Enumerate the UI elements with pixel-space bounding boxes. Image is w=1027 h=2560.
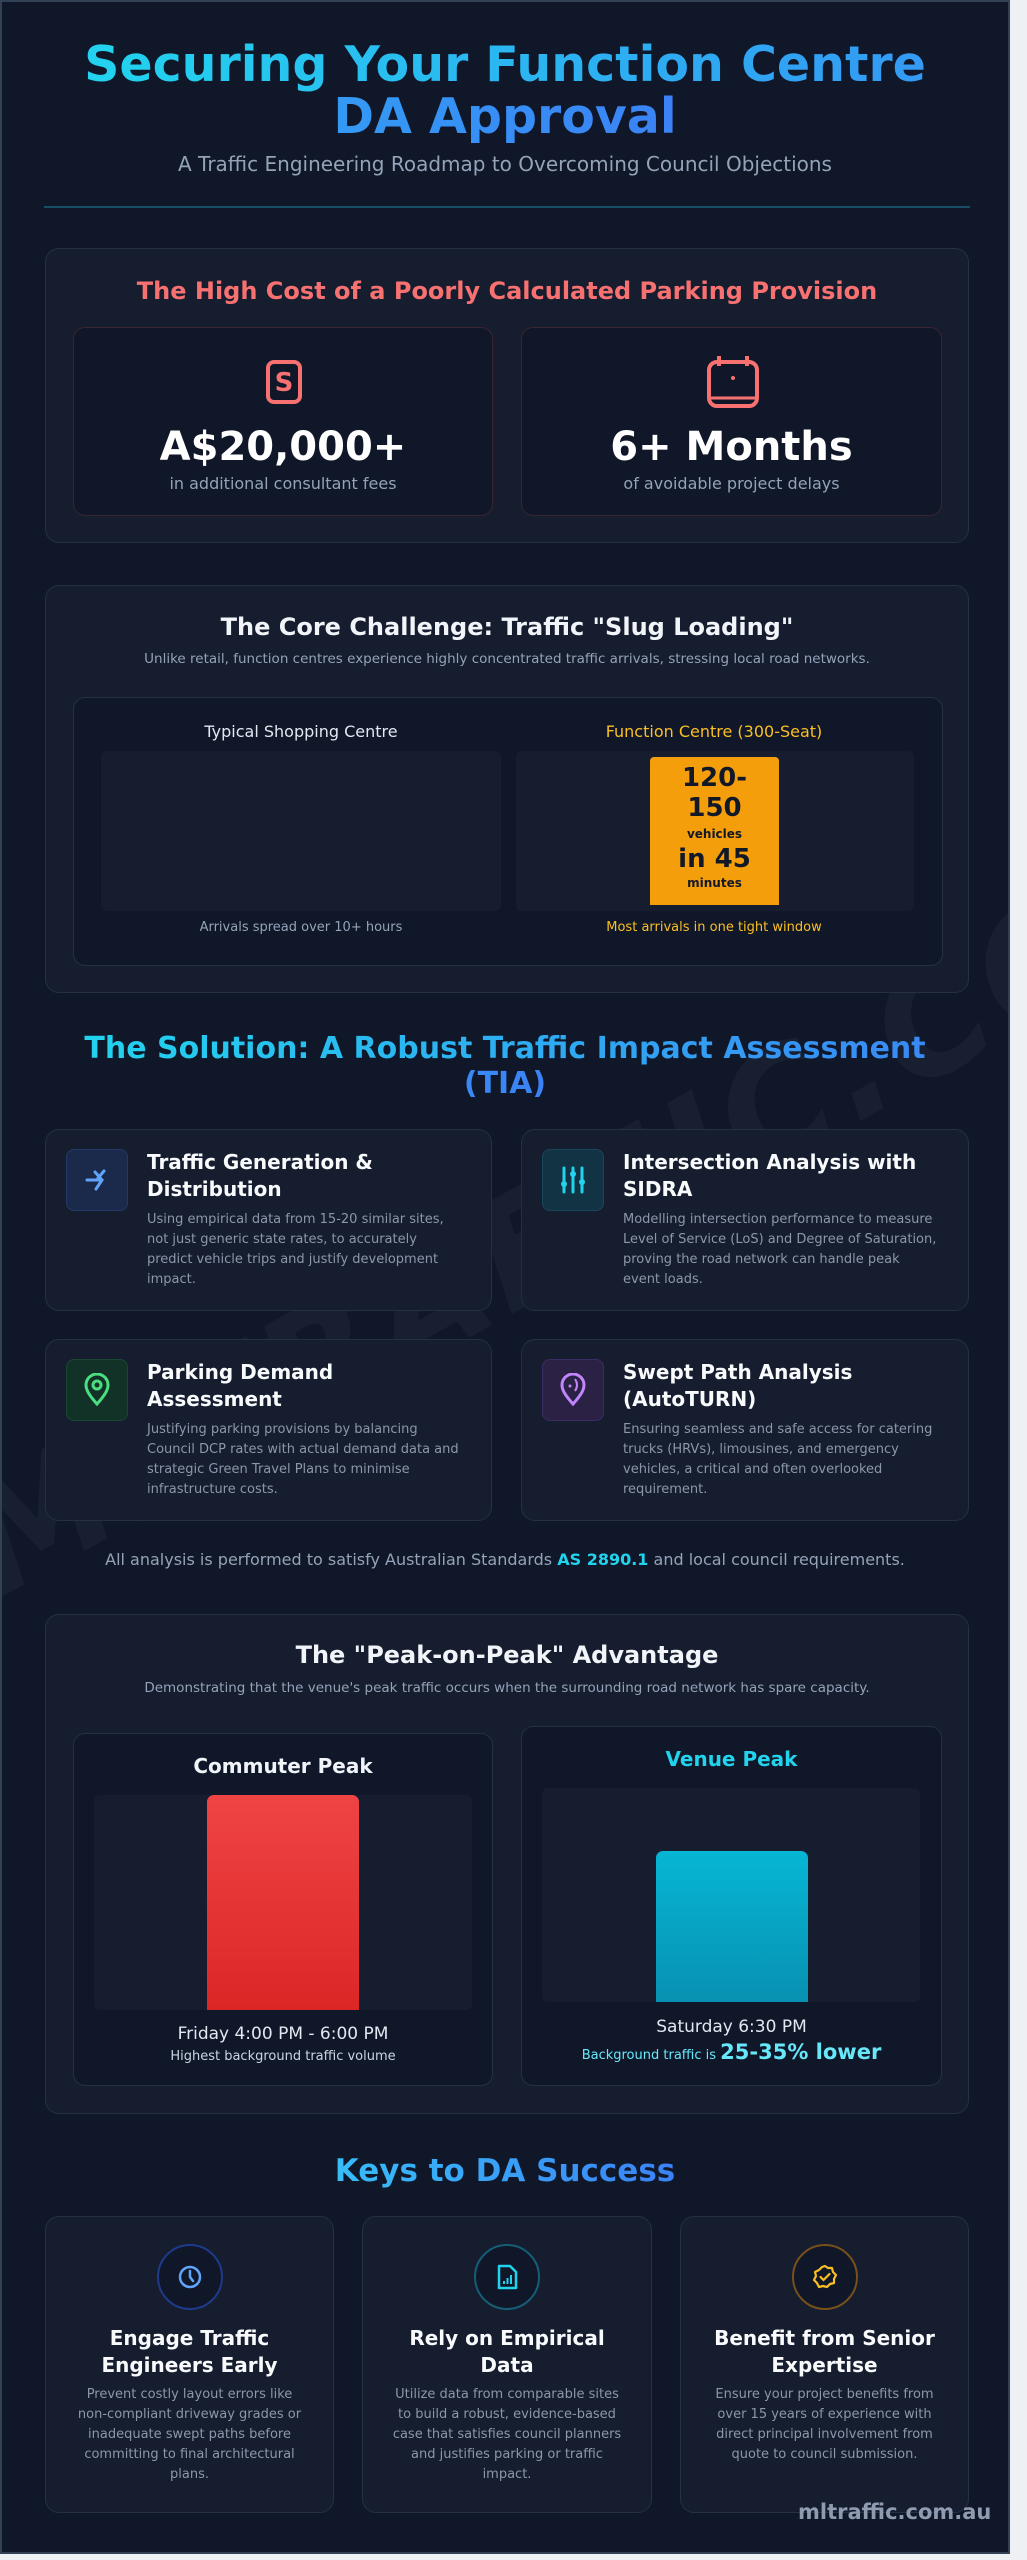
bar: commuter (207, 1795, 359, 2010)
panel: core challenge (45, 585, 969, 993)
card: parking demand: Justifying parking provisions by balancing (147, 1422, 418, 1437)
heading: solution: (TIA) (464, 1066, 546, 1101)
subtitle: A Traffic Engineering Roadmap to Overcoming Council Objections (178, 152, 832, 176)
icon: map pin (66, 1359, 128, 1421)
panel: peak on peak: Demonstrating that the venue's peak traffic occurs when the surrounding road network has spare capacity. (144, 1680, 870, 1696)
key card: senior expertise (680, 2216, 969, 2513)
bar: 120-150 vehicles in 45 minutes: minutes (687, 876, 742, 890)
chart: venue peak (521, 1726, 942, 2086)
card: SIDRA: Level of Service (LoS) and Degree of Saturation, (623, 1232, 936, 1247)
title: Securing Your Function Centre (84, 36, 926, 93)
bar: venue (656, 1851, 808, 2002)
card: swept path: vehicles, a critical and often overlooked (623, 1462, 882, 1477)
stat card: delays: of avoidable project delays (623, 474, 840, 493)
heading: keys: Keys to DA Success (335, 2153, 675, 2189)
card: swept path: requirement. (623, 1482, 707, 1497)
card: traffic generation: predict vehicle trips and justify development (147, 1252, 438, 1267)
icon: swept path (542, 1359, 604, 1421)
card: SIDRA (521, 1129, 969, 1311)
card: swept path (521, 1339, 969, 1521)
heading: peak on peak: The "Peak-on-Peak" Advantage (296, 1641, 718, 1669)
bar: 120-150 vehicles in 45 minutes (650, 757, 779, 905)
column: shopping centre (200, 722, 402, 935)
key card: empirical data (362, 2216, 652, 2513)
icon: badge check (792, 2244, 858, 2310)
card: traffic generation: Using empirical data from 15-20 similar sites, (147, 1212, 444, 1227)
footer: brand: mltraffic.com.au (798, 2500, 991, 2524)
card: traffic generation: Traffic Generation & Distribution (147, 1150, 373, 1201)
column: function centre (606, 722, 822, 935)
comparison chart (73, 697, 943, 966)
key card: senior expertise: Benefit from Senior Expertise (714, 2326, 935, 2377)
stat: A$20,000+: A$20,000+ (160, 424, 406, 470)
icon: sliders (542, 1149, 604, 1211)
chart: commuter peak: Commuter Peak (193, 1754, 373, 1778)
card: swept path: Ensuring seamless and safe access for catering (623, 1422, 932, 1437)
card: traffic generation: not just generic state rates, to accurately (147, 1232, 417, 1247)
bar: 120-150 vehicles in 45 minutes: 150 (687, 793, 742, 823)
heading: high cost: The High Cost of a Poorly Calculated Parking Provision (137, 277, 877, 305)
stat card: fees: in additional consultant fees (169, 474, 397, 493)
stat: 6+ months: 6+ Months (610, 424, 853, 470)
key card: engage early (45, 2216, 334, 2513)
card: traffic generation (45, 1129, 492, 1311)
column: function centre: Most arrivals in one tight window (606, 920, 822, 935)
card: SIDRA: Modelling intersection performance to measure (623, 1212, 932, 1227)
icon: calendar (707, 356, 759, 408)
column: shopping centre: Arrivals spread over 10+ hours (200, 920, 402, 935)
stat card: delays (521, 327, 942, 516)
card: SIDRA: proving the road network can handle peak (623, 1252, 900, 1267)
bar: 120-150 vehicles in 45 minutes: vehicles (687, 827, 742, 841)
card: SIDRA: Intersection Analysis with SIDRA (623, 1150, 916, 1201)
footnote: standards: All analysis is performed to satisfy Australian Standards AS 2890.1 and local council requirements. (105, 1550, 905, 1569)
bar: 120-150 vehicles in 45 minutes: 120- (682, 763, 747, 793)
title (84, 36, 926, 145)
heading: solution: The Solution: A Robust Traffic Impact Assessment (84, 1031, 926, 1066)
chart: venue peak: Background traffic is 25-35% lower (582, 2040, 881, 2064)
title: DA Approval (333, 88, 677, 145)
icon: money (266, 360, 302, 404)
panel: core challenge: Unlike retail, function centres experience highly concentrated traffic arrivals, stressing local road networks. (144, 651, 870, 667)
bar: 120-150 vehicles in 45 minutes: in 45 (678, 844, 751, 874)
card: traffic generation: impact. (147, 1272, 196, 1287)
column: function centre: Function Centre (300-Seat) (606, 722, 822, 741)
key card: engage early: Engage Traffic Engineers Early (101, 2326, 278, 2377)
icon: money: S (275, 368, 293, 398)
icon: data file (474, 2244, 540, 2310)
chart: venue peak: Venue Peak (666, 1747, 797, 1771)
column: shopping centre: Typical Shopping Centre (204, 722, 398, 741)
icon: clock (156, 2244, 222, 2310)
key card: senior expertise: Ensure your project benefits from over 15 years of experience with direct principal involvement from quote to council submission. (715, 2387, 934, 2462)
key card: empirical data: Utilize data from comparable sites to build a robust, evidence-based case that satisfies council planners and justifies parking or traffic impact. (393, 2387, 621, 2482)
chart: venue peak: Saturday 6:30 PM (656, 2017, 807, 2037)
card: parking demand: infrastructure costs. (147, 1482, 278, 1497)
card: parking demand: Parking Demand Assessment (147, 1360, 333, 1411)
card: parking demand: strategic Green Travel Plans to minimise (147, 1462, 410, 1477)
panel: high cost (45, 248, 969, 543)
stat card: fees (73, 327, 493, 516)
card: swept path: Swept Path Analysis (AutoTURN) (623, 1360, 852, 1411)
heading: core challenge: The Core Challenge: Traffic "Slug Loading" (221, 613, 793, 641)
card: parking demand (45, 1339, 492, 1521)
card: SIDRA: event loads. (623, 1272, 703, 1287)
card: parking demand: Council DCP rates with actual demand data and (147, 1442, 459, 1457)
key card: empirical data: Rely on Empirical Data (409, 2326, 605, 2377)
icon: split arrow (66, 1149, 128, 1211)
panel: peak on peak (45, 1614, 969, 2114)
heading: solution (84, 1031, 926, 1101)
key card: engage early: Prevent costly layout errors like non‑compliant driveway grades or inadequate swept paths before committing to final architectural plans. (78, 2387, 301, 2482)
chart: commuter peak (73, 1733, 493, 2086)
card: swept path: trucks (HRVs), limousines, and emergency (623, 1442, 899, 1457)
chart: commuter peak: Highest background traffic volume (170, 2049, 396, 2064)
chart: commuter peak: Friday 4:00 PM - 6:00 PM (178, 2024, 388, 2044)
